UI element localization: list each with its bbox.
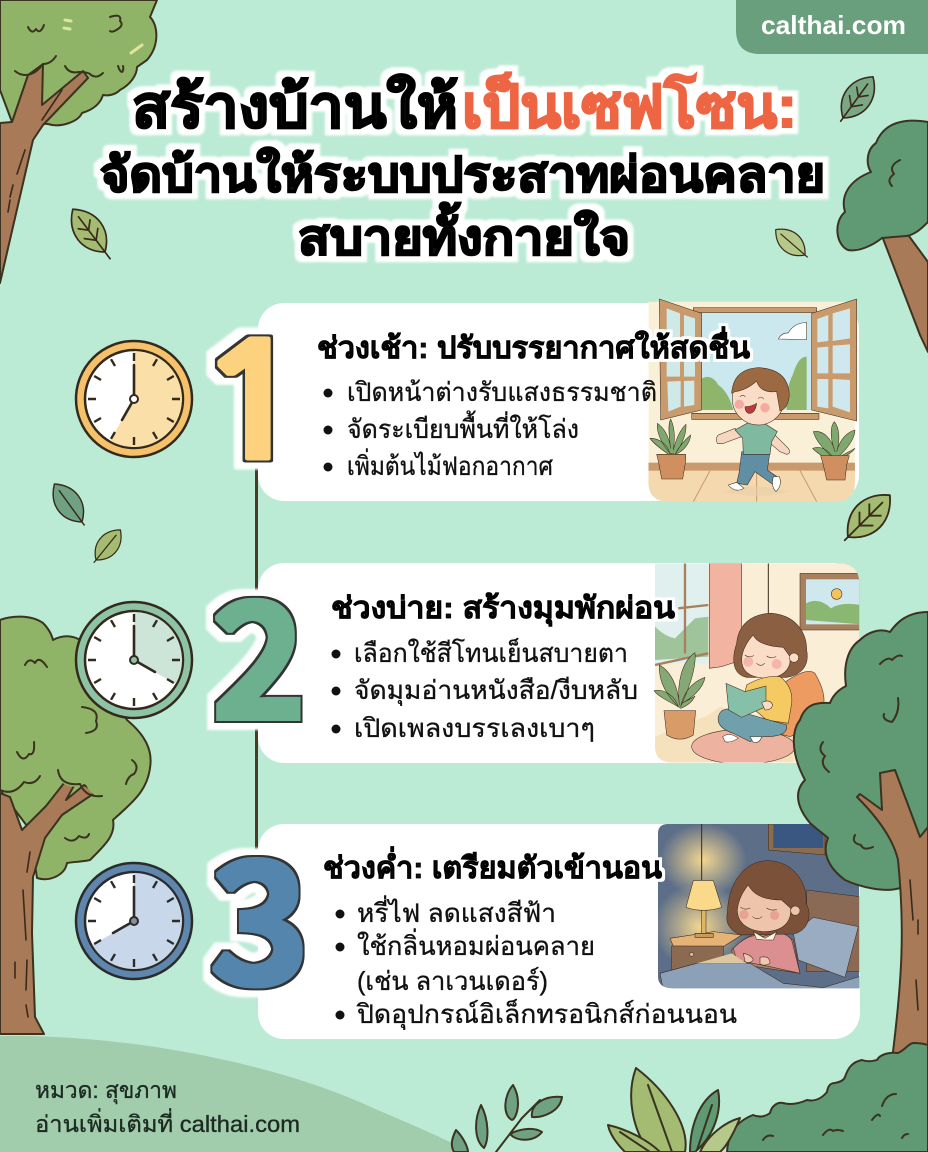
title: สร้างบ้านให้: [132, 73, 458, 140]
illustration: girl in bed at night: [653, 823, 859, 990]
bullets: เปิดหน้าต่างรับแสงธรรมชาติ: [347, 377, 657, 407]
footer text: อ่านเพิ่มเติมที่ calthai.com: [35, 1108, 300, 1137]
panel: evening card: [258, 824, 860, 1039]
site tab: [736, 0, 928, 54]
site tab: calthai.com: [761, 10, 906, 40]
tree: top left: [0, 0, 157, 283]
leaf: right of title: [769, 222, 814, 265]
footer hill: [0, 1036, 470, 1152]
bullets: เลือกใช้สีโทนเย็นสบายตา: [354, 637, 628, 668]
title: จัดบ้านให้ระบบประสาทผ่อนคลาย: [100, 146, 825, 202]
clock: morning 7 o'clock: [76, 341, 192, 457]
bullets: (เช่น ลาเวนเดอร์): [357, 966, 548, 996]
title: [100, 72, 825, 265]
title: เป็นเซฟโซน:: [462, 72, 797, 140]
bullets: จัดมุมอ่านหนังสือ/งีบหลับ: [354, 675, 638, 706]
bullets: เปิดเพลงบรรเลงเบาๆ: [354, 713, 595, 743]
footer text: หมวด: สุขภาพ: [35, 1077, 177, 1104]
leaf: left light: [86, 523, 128, 569]
text: evening: [323, 846, 737, 1030]
leaf: top right: [830, 69, 884, 129]
bullets: ใช้กลิ่นหอมผ่อนคลาย: [357, 928, 595, 961]
number 2: 2: [211, 531, 307, 766]
illustration: girl reading: [654, 563, 863, 764]
leaf: right light: [834, 484, 901, 551]
plant: [654, 653, 705, 739]
bullets: ปิดอุปกรณ์อิเล็กทรอนิกส์ก่อนนอน: [356, 998, 737, 1030]
plant left: [650, 419, 691, 479]
bullets: หรี่ไฟ ลดแสงสีฟ้า: [357, 895, 556, 928]
clock: afternoon 4 o'clock: [76, 602, 192, 718]
bullets: เพิ่มต้นไม้ฟอกอากาศ: [347, 448, 553, 481]
clock: evening 8 o'clock: [76, 863, 192, 979]
bullets: [336, 895, 737, 1030]
boy character: [716, 368, 790, 496]
text: morning: [317, 326, 750, 481]
bottom bush: [727, 1043, 928, 1152]
heading: ช่วงบ่าย: สร้างมุมพักผ่อน: [331, 592, 676, 627]
bullets: จัดระเบียบพื้นที่ให้โล่ง: [347, 410, 579, 444]
illustration: boy by window: [648, 299, 857, 502]
table lamp: [686, 881, 722, 937]
bullets: [332, 637, 638, 743]
heading: ช่วงเช้า: ปรับบรรยากาศให้สดชื่น: [317, 326, 750, 365]
timeline connector: [255, 460, 258, 870]
leaf: left of title: [61, 201, 121, 267]
number 3: 3: [210, 787, 310, 1033]
tree: lower right: [794, 612, 928, 1060]
title: สบายทั้งกายใจ: [298, 202, 630, 265]
text: afternoon: [331, 592, 676, 743]
plant right: [813, 422, 855, 480]
girl character: [718, 613, 824, 743]
bullets: [324, 377, 657, 481]
leaf: left dark: [44, 477, 94, 532]
heading: ช่วงค่ำ: เตรียมตัวเข้านอน: [323, 846, 662, 885]
tree: lower left: [0, 617, 151, 1034]
tree: top right: [837, 121, 928, 352]
panel: morning card: [258, 303, 859, 501]
bottom plant: sprig: [452, 1085, 562, 1152]
panel: afternoon card: [258, 563, 859, 763]
footer text: [35, 1077, 300, 1137]
bottom plant: broad leaves: [608, 1068, 740, 1152]
number 1: 1: [195, 326, 312, 482]
